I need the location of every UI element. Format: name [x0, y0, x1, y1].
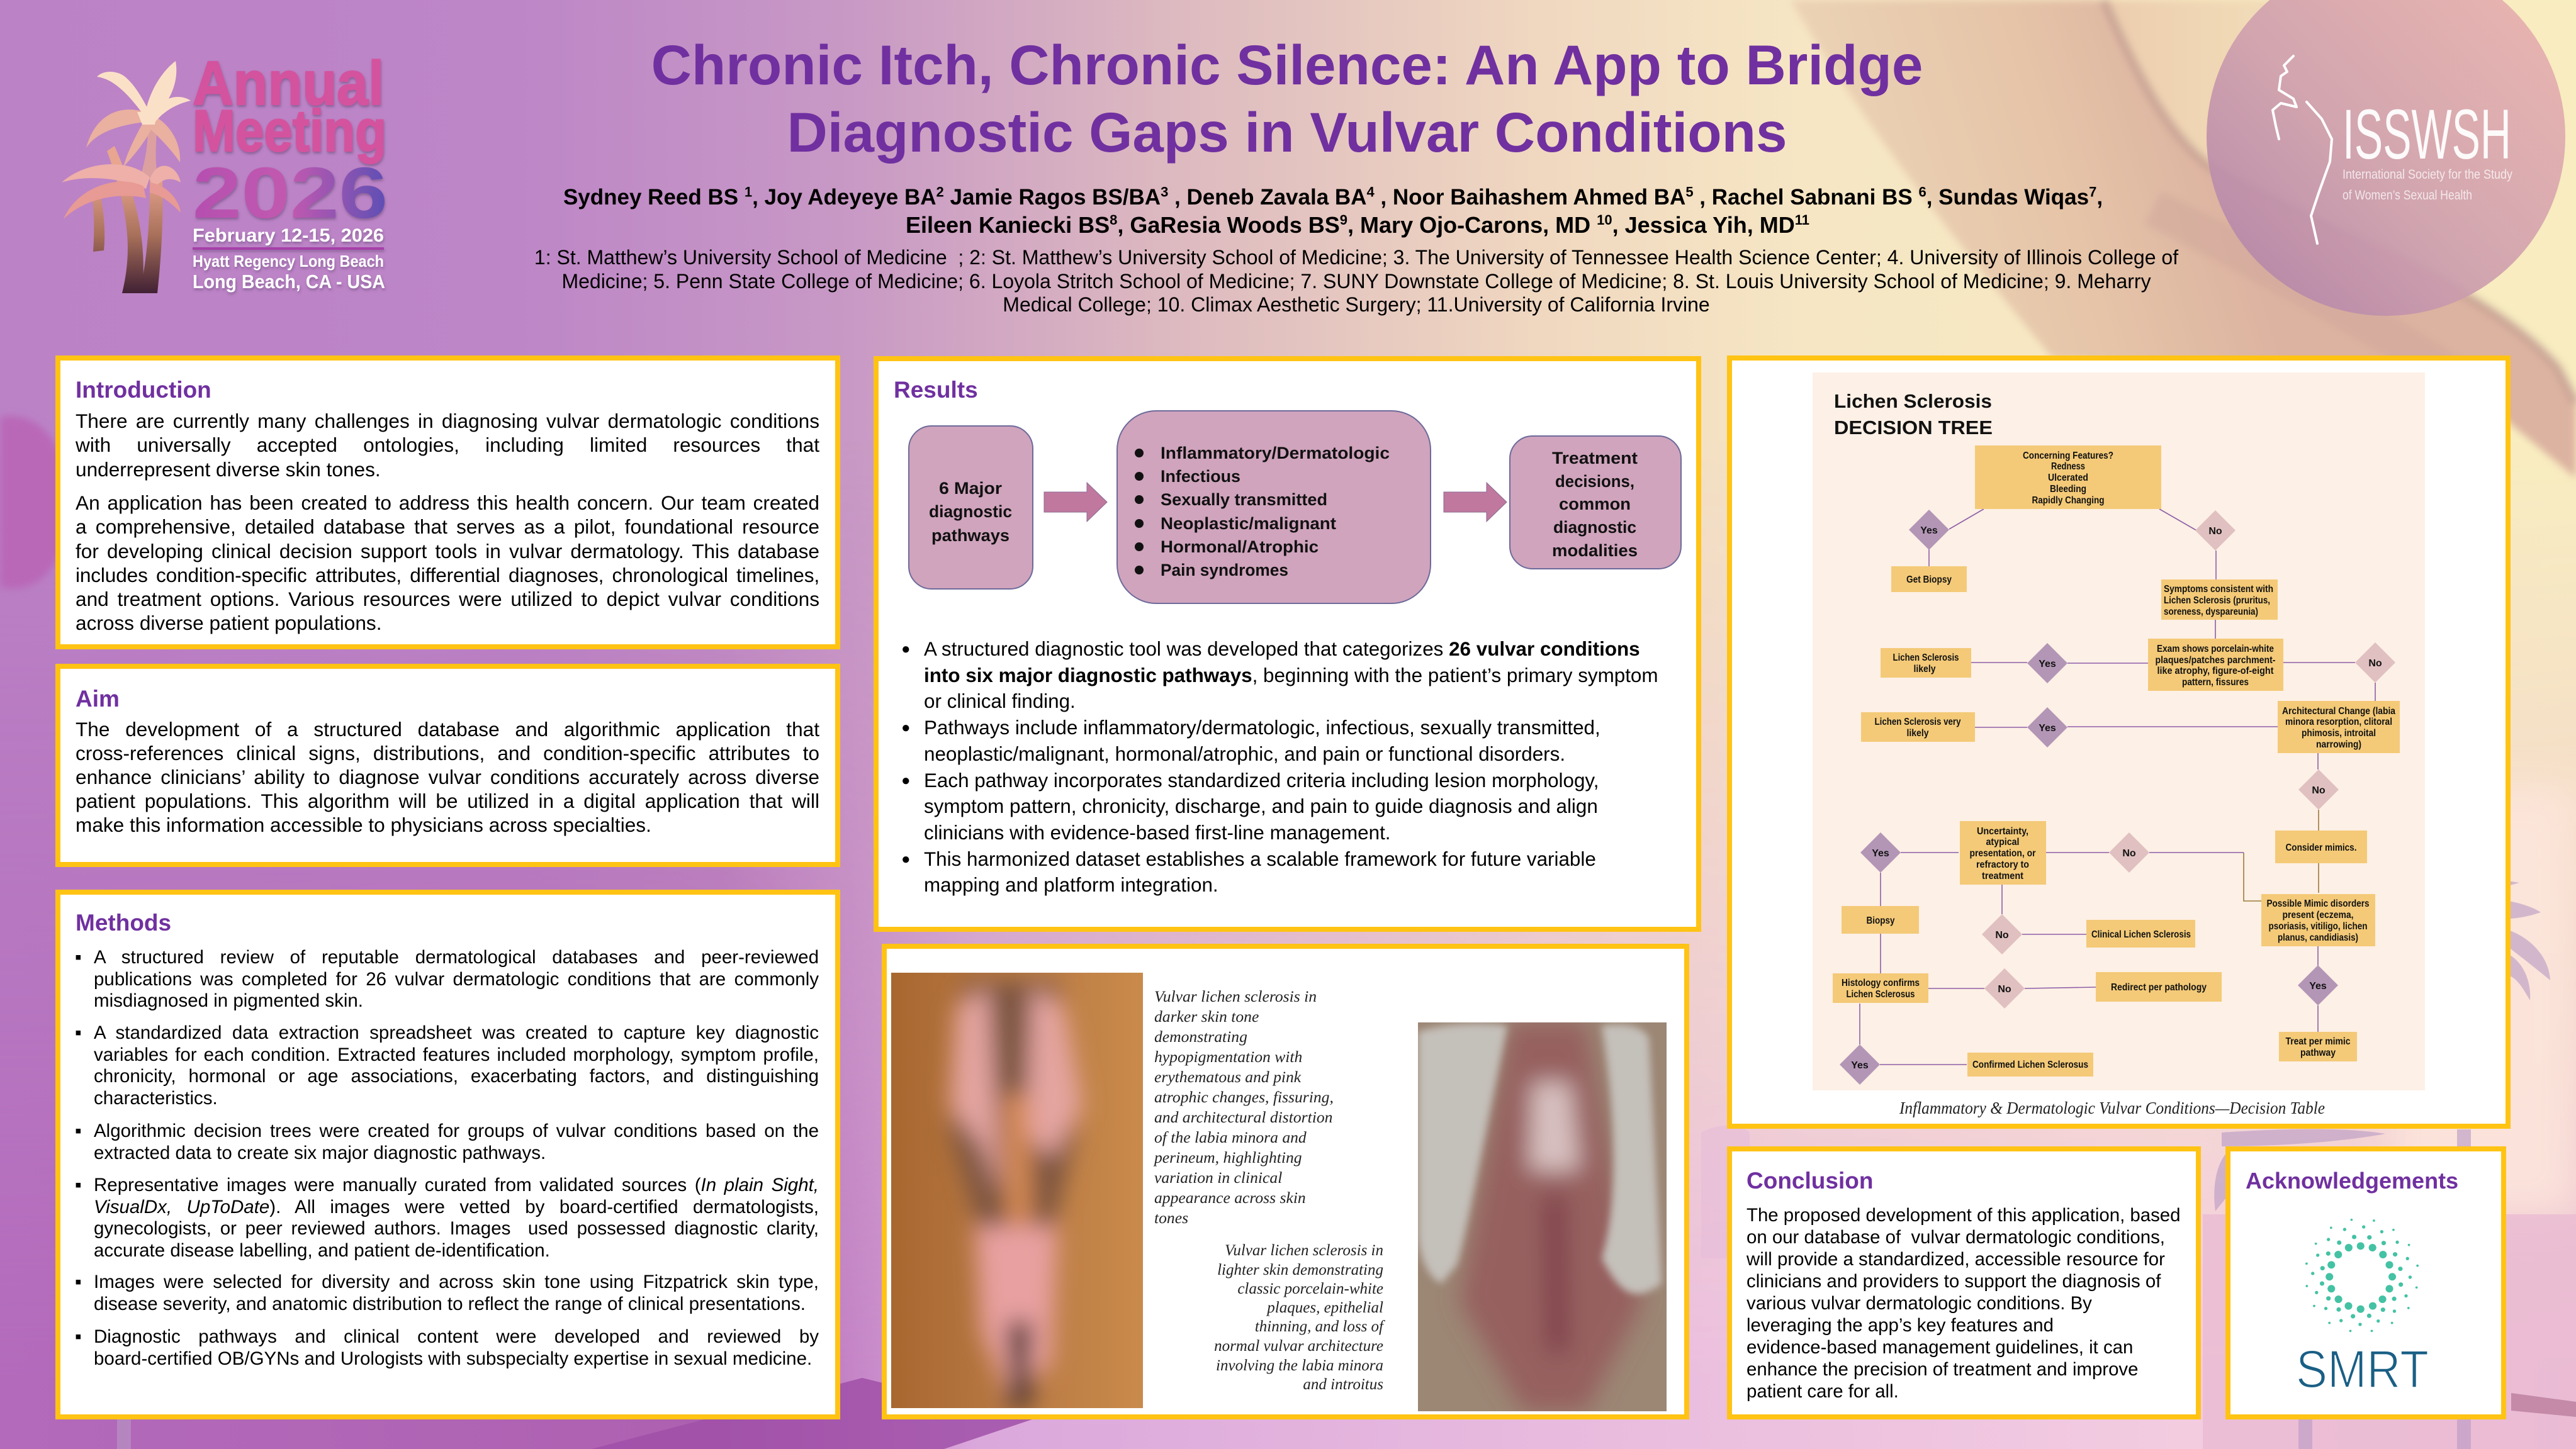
text block: conclusion: enhance the precision of treatment and improve	[1746, 1359, 2138, 1380]
affiliations: 1: St. Matthew’s University School of Medicine ; 2: St. Matthew’s University School of Medicine; 3. The University of Tennessee Health Science Center; 4. University of Illinois College of	[534, 246, 2178, 269]
methods bullet: image diversity	[75, 1272, 819, 1314]
logo text: February 12-15, 2026	[193, 225, 384, 246]
node: possible mimic disorders	[2261, 894, 2375, 946]
box: 6 major diagnostic pathways: pathways	[931, 526, 1010, 545]
node: possible mimic disorders: present (eczema,	[2282, 910, 2354, 920]
node: possible mimic disorders: psoriasis, vitiligo, lichen	[2268, 921, 2368, 932]
node: confirmed lichen sclerosus: Confirmed Lichen Sclerosus	[1972, 1060, 2088, 1070]
node: clinical lichen sclerosis	[2086, 920, 2195, 948]
box: treatment decisions: modalities	[1552, 541, 1638, 560]
methods bullet: image diversity: Images were selected for diversity and across skin tone using Fitzpatrick skin type,	[94, 1272, 819, 1292]
diamond: yes, biopsy second	[1860, 832, 1901, 873]
methods bullet: representative images: gynecologists, or peer reviewed authors. Images used possessed diagnostic clarity,	[94, 1218, 819, 1239]
node: redirect per pathology: Redirect per pathology	[2111, 982, 2207, 993]
node: concerning features: Bleeding	[2050, 484, 2086, 495]
bullet: pathways: neoplastic/malignant, hormonal/atrophic, and pain or functional disorders.	[924, 743, 1565, 765]
node: consider mimics	[2275, 831, 2367, 863]
node: architectural change: narrowing)	[2316, 739, 2361, 750]
decision tree title: DECISION TREE	[1834, 417, 1993, 439]
methods bullet: decision trees: extracted data to create six major diagnostic pathways.	[94, 1143, 546, 1163]
logo wordmark: SMRT	[2296, 1340, 2429, 1399]
text block: conclusion: patient care for all.	[1746, 1381, 1899, 1402]
node: possible mimic disorders: planus, candidiasis)	[2278, 932, 2358, 943]
methods bullet: representative images	[75, 1175, 819, 1261]
arrow: to pathway list	[1044, 483, 1107, 522]
caption: lighter skin tone: plaques, epithelial	[1266, 1299, 1383, 1316]
node: lichen sclerosis very likely: likely	[1907, 728, 1929, 739]
caption: lighter skin tone: lighter skin demonstrating	[1217, 1262, 1383, 1278]
methods bullet: review by specialists	[75, 1326, 819, 1369]
caption: lighter skin tone: normal vulvar architecture	[1214, 1338, 1383, 1355]
diamond: yes, mimic	[2298, 965, 2338, 1005]
node: get biopsy	[1891, 566, 1967, 592]
logo text	[193, 48, 388, 293]
caption: decision table: Inflammatory & Dermatologic Vulvar Conditions—Decision Table	[1899, 1099, 2325, 1117]
panel: methods: ▪	[75, 1175, 82, 1195]
text block: introduction second paragraph: across diverse patient populations.	[76, 612, 381, 634]
diamond: yes, confirmed: Yes	[1851, 1060, 1869, 1071]
box: pathway list: Hormonal/Atrophic	[1161, 537, 1319, 556]
panel: methods: ▪	[75, 1272, 82, 1292]
panel: conclusion	[1727, 1146, 2201, 1419]
text block: introduction second paragraph: and treatment options. Various resources were utilized to depict vulvar conditions	[76, 588, 819, 610]
panel: results: ●	[901, 719, 910, 736]
methods bullet: structured review	[75, 947, 819, 1011]
panel: aim	[55, 664, 840, 867]
diamond: no, mimics	[2298, 769, 2339, 810]
node: architectural change: phimosis, introital	[2302, 728, 2376, 739]
node: lichen sclerosis very likely	[1861, 712, 1975, 742]
node: concerning features	[1975, 445, 2161, 509]
node: uncertainty	[1960, 821, 2046, 885]
methods bullet: structured review: misdiagnosed in pigmented skin.	[94, 990, 363, 1011]
node: architectural change	[2278, 701, 2400, 753]
text block: introduction first paragraph: There are currently many challenges in diagnosing vulvar dermatologic conditions	[76, 410, 819, 432]
title	[651, 33, 1923, 164]
caption: darker skin tone: appearance across skin	[1154, 1189, 1306, 1207]
panel: results: ●	[901, 772, 910, 789]
text block: conclusion: leveraging the app’s key features and	[1746, 1315, 2054, 1336]
box: pathway list: Neoplastic/malignant	[1161, 514, 1336, 533]
caption: lighter skin tone: classic porcelain-white	[1237, 1280, 1383, 1297]
node: uncertainty: Uncertainty,	[1977, 826, 2028, 837]
diamond: yes, likely: Yes	[2039, 659, 2056, 669]
node: lichen sclerosis very likely: Lichen Sclerosis very	[1874, 717, 1961, 727]
methods bullet: representative images: accurate disease labelling, and patient de-identification.	[94, 1240, 550, 1261]
logo: annual meeting 2026	[62, 48, 388, 296]
text block: aim	[76, 718, 819, 836]
text block: aim: make this information accessible to physicians across specialties.	[76, 814, 651, 836]
image: clinical photo, lighter skin tone (abstract colour placeholder)	[1418, 1022, 1667, 1411]
caption: darker skin tone: darker skin tone	[1154, 1007, 1259, 1026]
node: concerning features: Rapidly Changing	[2032, 495, 2105, 506]
methods bullet: image diversity: disease severity, and anatomic distribution to reflect the range of clinical presentations.	[94, 1294, 806, 1314]
node: exam findings: pattern, fissures	[2182, 677, 2249, 688]
bullet: pathways	[901, 717, 1600, 765]
node: uncertainty: treatment	[1982, 871, 2023, 881]
node: uncertainty: refractory to	[1976, 859, 2029, 870]
bullet: structured tool	[901, 638, 1658, 712]
node: architectural change: minora resorption, clitoral	[2285, 717, 2392, 727]
logo wordmark: International Society for the Study	[2343, 167, 2512, 182]
diamond: yes, biopsy second: Yes	[1872, 848, 1889, 859]
affiliations: Medicine; 5. Penn State College of Medicine; 6. Loyola Stritch School of Medicine; 7. SUNY Downstate College of Medicine; 8. St. Louis University School of Medicine; 9. Meharry	[561, 270, 2151, 293]
panel: methods: ▪	[75, 1121, 82, 1141]
box: pathway list: Sexually transmitted	[1161, 490, 1327, 509]
text block: introduction second paragraph	[76, 491, 819, 634]
node: consider mimics: Consider mimics.	[2286, 842, 2356, 853]
box: pathway list: Infectious	[1161, 467, 1240, 486]
node: histology confirms: Histology confirms	[1842, 978, 1920, 988]
text block: conclusion	[1746, 1204, 2181, 1402]
caption: darker skin tone	[1153, 987, 1334, 1227]
panel: clinical images	[882, 944, 1689, 1419]
diamond: yes, very likely: Yes	[2039, 723, 2056, 734]
caption: darker skin tone: hypopigmentation with	[1154, 1048, 1302, 1066]
caption: darker skin tone: atrophic changes, fissuring,	[1154, 1088, 1334, 1106]
bullet: pathways: Pathways include inflammatory/dermatologic, infectious, sexually transmitted,	[924, 717, 1600, 739]
box: 6 major diagnostic pathways: 6 Major	[939, 479, 1003, 498]
panel: introduction	[55, 355, 840, 649]
panel: methods	[55, 890, 840, 1419]
node: symptoms: Symptoms consistent with	[2164, 584, 2273, 595]
logo wordmark	[2343, 95, 2512, 203]
bullet: criteria: clinicians with evidence-based first-line management.	[924, 822, 1391, 844]
bullet: criteria	[901, 769, 1599, 844]
methods bullet: decision trees: Algorithmic decision trees were created for groups of vulvar conditions based on the	[94, 1121, 819, 1141]
box: treatment decisions	[1510, 436, 1681, 569]
methods bullet: review by specialists: Diagnostic pathways and clinical content were developed and reviewed by	[94, 1326, 819, 1347]
methods bullet: representative images: Representative images were manually curated from validated sources (In plain Sight,	[94, 1175, 819, 1195]
authors: Sydney Reed BS 1, Joy Adeyeye BA2 Jamie Ragos BS/BA3 , Deneb Zavala BA4 , Noor Baihashem Ahmed BA5 , Rachel Sabnani BS 6, Sundas Wiqas7,	[563, 184, 2103, 210]
box: pathway list: Pain syndromes	[1161, 561, 1288, 579]
node: uncertainty: presentation, or	[1970, 848, 2035, 859]
text block: aim: cross-references clinical signs, distributions, and condition-specific attributes to	[76, 742, 819, 764]
heading: conclusion: Conclusion	[1746, 1168, 1873, 1194]
diamond: yes, confirmed	[1840, 1044, 1880, 1085]
node: clinical lichen sclerosis: Clinical Lichen Sclerosis	[2091, 929, 2191, 940]
node: redirect per pathology	[2096, 972, 2222, 1002]
box: 6 major diagnostic pathways	[909, 426, 1033, 589]
node: concerning features: Redness	[2051, 461, 2085, 472]
heading: methods: Methods	[76, 910, 171, 936]
text block: introduction second paragraph: for developing clinical decision support tools in vulvar dermatology. This database	[76, 540, 819, 562]
caption: lighter skin tone: involving the labia minora	[1216, 1357, 1383, 1374]
methods bullet: structured review: A structured review of reputable dermatological databases and peer-reviewed	[94, 947, 819, 968]
heading: acknowledgements: Acknowledgements	[2246, 1168, 2458, 1194]
connector lines	[1860, 509, 2375, 1065]
diamond: no, architectural: No	[2368, 658, 2382, 669]
text block: conclusion: clinicians and providers to support the diagnosis of	[1746, 1271, 2161, 1292]
diamond: yes, likely	[2027, 643, 2067, 683]
decision tree title: Lichen Sclerosis	[1834, 390, 1992, 412]
logo silhouette	[2273, 56, 2332, 243]
diamond: yes, very likely	[2027, 707, 2067, 747]
bullet: criteria: Each pathway incorporates standardized criteria including lesion morphology,	[924, 769, 1599, 792]
node: confirmed lichen sclerosus	[1967, 1053, 2093, 1077]
node: exam findings: Exam shows porcelain-white	[2157, 644, 2274, 654]
box: treatment decisions: decisions,	[1555, 472, 1634, 491]
caption: lighter skin tone: Vulvar lichen sclerosis in	[1225, 1242, 1383, 1259]
diamond: no, symptoms: No	[2208, 526, 2222, 537]
logo text: 2026	[193, 153, 388, 233]
decorative palms	[117, 881, 2550, 1449]
bullet: dataset: This harmonized dataset establishes a scalable framework for future variable	[924, 848, 1596, 870]
node: get biopsy: Get Biopsy	[1906, 574, 1952, 585]
node: lichen sclerosis likely: Lichen Sclerosis	[1893, 652, 1959, 663]
panel: methods: ▪	[75, 1326, 82, 1347]
authors: Eileen Kaniecki BS8, GaResia Woods BS9, Mary Ojo-Carons, MD 10, Jessica Yih, MD11	[906, 212, 1809, 238]
text block: introduction first paragraph	[76, 410, 819, 481]
bullet: criteria: symptom pattern, chronicity, discharge, and pain to guide diagnosis and align	[924, 795, 1598, 817]
node: lichen sclerosis likely	[1881, 648, 1971, 678]
caption: darker skin tone: erythematous and pink	[1154, 1068, 1302, 1086]
text block: conclusion: The proposed development of this application, based	[1746, 1205, 2181, 1226]
text block: introduction second paragraph: An application has been created to address this health concern. Our team created	[76, 491, 819, 514]
bullet: dataset	[901, 848, 1596, 896]
panel: results: ●	[901, 851, 910, 868]
panel: acknowledgements	[2225, 1146, 2506, 1419]
caption: darker skin tone: of the labia minora and	[1154, 1128, 1307, 1146]
affiliations: Medical College; 10. Climax Aesthetic Surgery; 11.University of California Irvine	[1003, 293, 1710, 316]
node: concerning features: Concerning Features?	[2023, 450, 2113, 461]
box: pathway list: Inflammatory/Dermatologic	[1161, 444, 1390, 462]
logo wordmark: of Women’s Sexual Health	[2343, 188, 2472, 203]
diamond: no, symptoms	[2195, 510, 2236, 551]
text block: introduction first paragraph: with universally accepted ontologies, including limited resources that	[76, 434, 819, 456]
diamond: no, architectural	[2355, 642, 2395, 683]
bullet: structured tool: or clinical finding.	[924, 690, 1076, 712]
methods bullet: representative images: VisualDx, UpToDate). All images were vetted by board-certified dermatologists,	[94, 1197, 819, 1217]
node: histology confirms: Lichen Sclerosus	[1847, 989, 1915, 1000]
icon: palm trees	[62, 61, 191, 293]
decision tree title	[1834, 390, 1993, 439]
diamond: no, pathology	[1984, 968, 2025, 1009]
panel: methods: ▪	[75, 1022, 82, 1043]
node: lichen sclerosis likely: likely	[1913, 664, 1936, 674]
authors	[563, 184, 2103, 238]
methods bullet: review by specialists: board-certified OB/GYNs and Urologists with subspecialty expertise in sexual medicine.	[94, 1348, 812, 1369]
panel: results: ●	[901, 641, 910, 657]
node: symptoms	[2161, 579, 2278, 620]
caption: darker skin tone: Vulvar lichen sclerosis in	[1154, 987, 1317, 1005]
diamond: yes, biopsy: Yes	[1920, 525, 1938, 536]
panel: decision tree	[1727, 355, 2511, 1129]
node: treat per mimic pathway: Treat per mimic	[2286, 1036, 2351, 1047]
methods bullet: data extraction: variables for each condition. Extracted features included morphology, symptom profile,	[94, 1044, 819, 1065]
text block: aim: patient populations. This algorithm will be utilized in a digital application that will	[76, 790, 819, 812]
logo: SMRT	[2230, 1151, 2501, 1414]
caption: lighter skin tone	[1214, 1242, 1385, 1393]
panel: results	[874, 356, 1701, 932]
arrow: to treatment decisions	[1444, 483, 1507, 522]
box: treatment decisions: diagnostic	[1553, 518, 1636, 537]
logo circle	[2207, 0, 2565, 316]
text block: conclusion: will provide a standardized, accessible resource for	[1746, 1249, 2165, 1270]
node: treat per mimic pathway: pathway	[2300, 1048, 2336, 1058]
caption: darker skin tone: variation in clinical	[1154, 1168, 1282, 1187]
logo text: Annual	[193, 48, 384, 118]
text block: conclusion: evidence-based management guidelines, it can	[1746, 1337, 2133, 1358]
methods bullet: data extraction: A standardized data extraction spreadsheet was created to capture key diagnostic	[94, 1022, 819, 1043]
node: biopsy: Biopsy	[1867, 915, 1895, 926]
methods bullet: data extraction: characteristics.	[94, 1088, 218, 1109]
box: 6 major diagnostic pathways: diagnostic	[929, 502, 1012, 521]
box: treatment decisions: Treatment	[1552, 449, 1638, 467]
methods bullet: data extraction	[75, 1022, 819, 1109]
box: treatment decisions: common	[1559, 495, 1631, 513]
text block: conclusion: on our database of vulvar dermatologic conditions,	[1746, 1227, 2165, 1248]
affiliations	[534, 246, 2179, 316]
node: biopsy	[1842, 906, 1919, 934]
bullet: structured tool: A structured diagnostic tool was developed that categorizes 26 vulvar conditions	[924, 638, 1640, 660]
node: exam findings: like atrophy, figure-of-eight	[2157, 666, 2273, 676]
caption: darker skin tone: tones	[1154, 1209, 1188, 1227]
node: symptoms: Lichen Sclerosis (pruritus,	[2164, 595, 2270, 606]
caption: darker skin tone: and architectural distortion	[1154, 1108, 1332, 1126]
caption: lighter skin tone: and introitus	[1303, 1376, 1383, 1393]
text block: conclusion: various vulvar dermatologic conditions. By	[1746, 1293, 2092, 1314]
decision tree background	[1813, 372, 2425, 1090]
diamond: no, clinical: No	[1995, 930, 2009, 941]
caption: darker skin tone: perineum, highlighting	[1153, 1148, 1302, 1166]
logo text: Meeting	[193, 98, 386, 164]
diamond: yes, biopsy	[1909, 510, 1949, 550]
diamond: yes, mimic: Yes	[2309, 981, 2327, 992]
results bullet list	[901, 638, 1658, 896]
caption: darker skin tone: demonstrating	[1154, 1027, 1247, 1046]
logo dots	[2305, 1219, 2419, 1332]
methods bullet: structured review: publications was completed for 26 vulvar dermatologic conditions that are commonly	[94, 969, 819, 990]
diamond: no, mimic route	[2109, 832, 2149, 873]
heading: introduction: Introduction	[76, 377, 211, 403]
heading: results: Results	[894, 377, 978, 403]
methods bullet: data extraction: chronicity, hormonal or age associations, exacerbating factors, and distinguishing	[94, 1066, 819, 1087]
flow diagram: diagnostic pathways	[908, 410, 1682, 604]
text block: introduction first paragraph: underrepresent diverse skin tones.	[76, 458, 381, 481]
diamond: no, mimics: No	[2312, 785, 2326, 796]
methods bullet: decision trees	[75, 1121, 819, 1163]
node: uncertainty: atypical	[1986, 837, 2019, 848]
node: architectural change: Architectural Change (labia	[2282, 706, 2395, 717]
logo: ISSWSH	[2207, 0, 2565, 316]
node: treat per mimic pathway	[2279, 1032, 2357, 1061]
logo text: Long Beach, CA - USA	[193, 271, 385, 293]
image: clinical photo, darker skin tone (abstract colour placeholder)	[891, 973, 1143, 1408]
title: Chronic Itch, Chronic Silence: An App to Bridge	[651, 33, 1923, 96]
node: exam findings: plaques/patches parchment-	[2155, 655, 2276, 666]
panel: methods: ▪	[75, 947, 82, 968]
text block: introduction second paragraph: a comprehensive, detailed database that serves as a pilot, foundational resource	[76, 515, 819, 538]
diamond: no, mimic route: No	[2122, 848, 2136, 859]
heading: aim: Aim	[76, 686, 120, 712]
title: Diagnostic Gaps in Vulvar Conditions	[787, 101, 1787, 164]
logo text: Hyatt Regency Long Beach	[193, 252, 384, 271]
diamond: no, clinical	[1982, 914, 2022, 954]
diamond: no, pathology: No	[1998, 984, 2011, 995]
text block: introduction second paragraph: includes condition-specific attributes, differential diagnoses, chronological timelines,	[76, 564, 819, 586]
node: possible mimic disorders: Possible Mimic disorders	[2267, 898, 2369, 909]
caption: lighter skin tone: thinning, and loss of	[1255, 1318, 1385, 1335]
text block: aim: enhance clinicians’ ability to diagnose vulvar conditions accurately across diverse	[76, 766, 819, 788]
text block: aim: The development of a structured database and algorithmic application that	[76, 718, 819, 741]
node: histology confirms	[1833, 973, 1928, 1003]
bullet: structured tool: into six major diagnostic pathways, beginning with the patient’s primary symptom	[924, 664, 1658, 686]
bullet: dataset: mapping and platform integration.	[924, 874, 1218, 896]
node: concerning features: Ulcerated	[2048, 473, 2088, 483]
node: exam findings	[2148, 639, 2283, 691]
box: pathway list	[1117, 411, 1431, 603]
node: symptoms: soreness, dyspareunia)	[2164, 607, 2258, 617]
